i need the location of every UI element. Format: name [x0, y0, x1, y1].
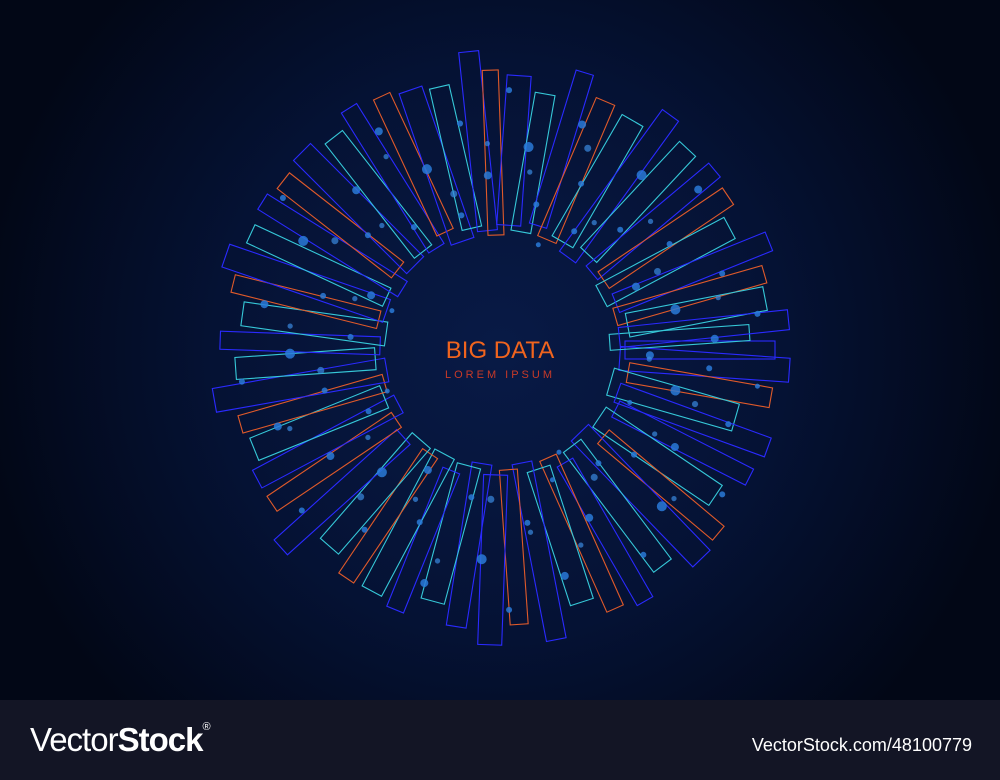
- footer bar: [0, 700, 1000, 780]
- footer logo: VectorStock®: [30, 721, 210, 758]
- subtitle: LOREM IPSUM: LOREM IPSUM: [445, 369, 555, 381]
- data dots: [239, 87, 761, 613]
- footer url: VectorStock.com/48100779: [752, 735, 972, 755]
- radial rectangles ring: [212, 51, 790, 645]
- title: BIG DATA: BIG DATA: [446, 337, 554, 364]
- extra data dots: [273, 126, 730, 580]
